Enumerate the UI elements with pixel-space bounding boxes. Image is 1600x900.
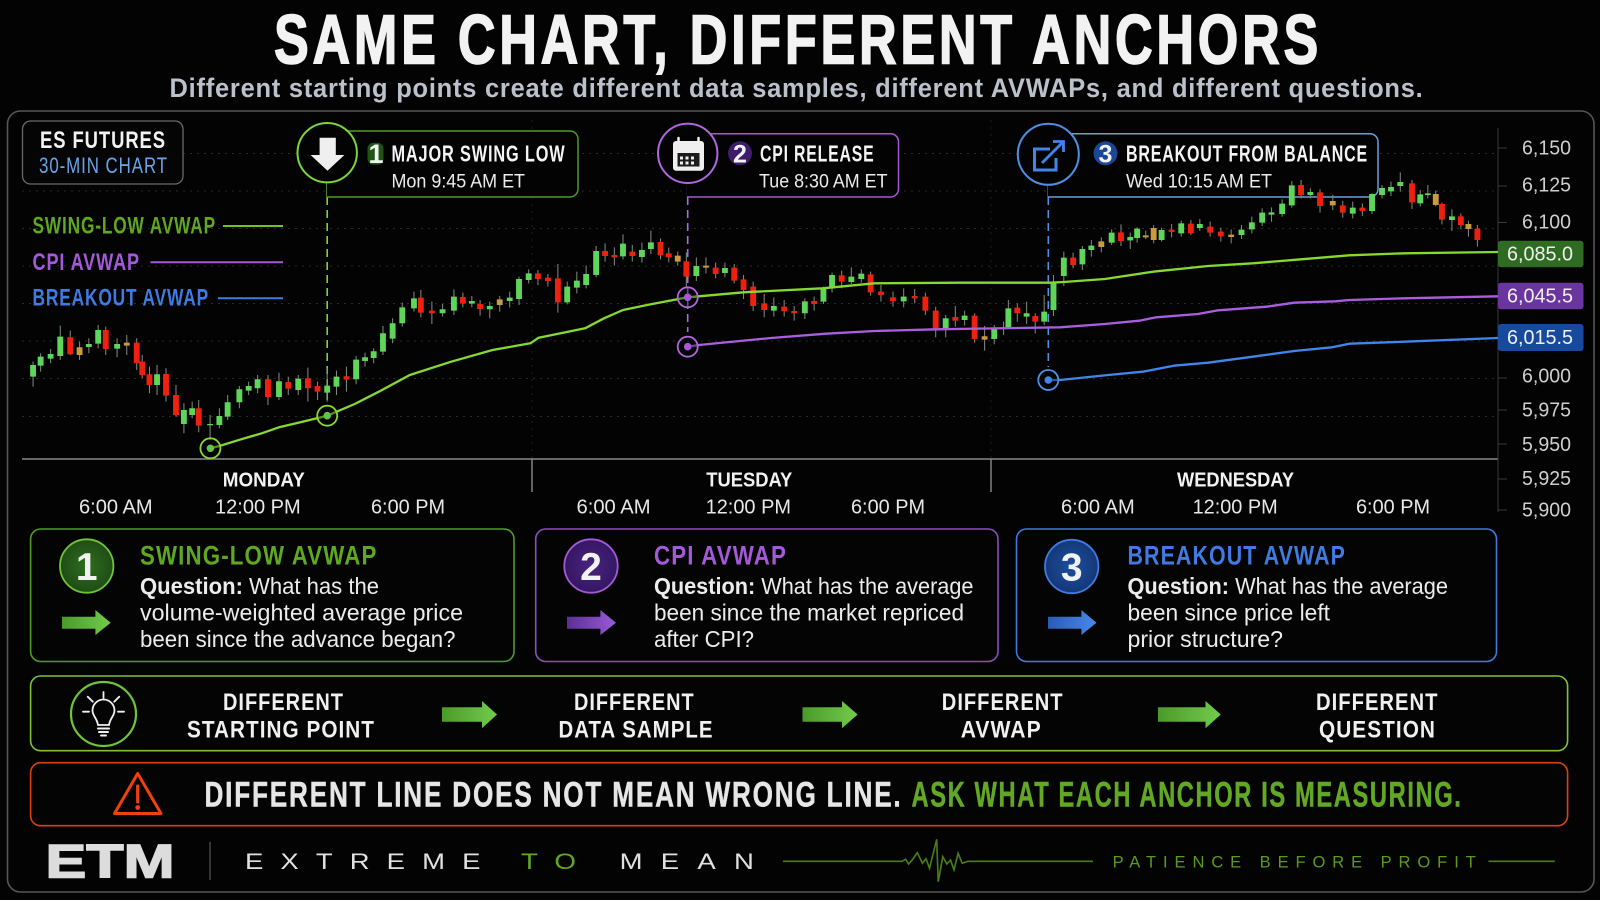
- icon: warning triangle: [114, 774, 161, 814]
- panel: breakout card: been since price left: [1128, 600, 1331, 626]
- arrow: [802, 701, 858, 728]
- panel: CPI card: after CPI?: [654, 626, 754, 652]
- panel: CPI card: CPI AVWAP: [654, 540, 787, 570]
- panel: breakout card: prior structure?: [1128, 626, 1283, 652]
- icon: calendar: [673, 138, 704, 171]
- icon: arrow: [1048, 610, 1096, 635]
- panel: logic chain band: AVWAP: [961, 716, 1042, 743]
- panel: CPI card: Question: What has the average: [654, 573, 974, 599]
- icon: light bulb: [71, 682, 136, 746]
- callout 3: breakout marker: [1018, 124, 1079, 185]
- time axis labels: 6:00 AM: [576, 496, 650, 518]
- panel: swing-low card: volume-weighted average price: [140, 600, 463, 626]
- callout 3 box (behind candles): BREAKOUT FROM BALANCE: [1126, 141, 1368, 167]
- price axis labels: 5,950: [1522, 434, 1571, 456]
- footer brand: TO: [521, 849, 593, 874]
- price axis labels: 6,125: [1522, 175, 1571, 197]
- time axis labels: [79, 469, 1430, 518]
- panel: logic chain band: DIFFERENT: [942, 689, 1064, 716]
- callout 1: major swing low: Mon 9:45 AM ET: [392, 171, 525, 193]
- candlesticks: tuesday: [548, 231, 1064, 351]
- tag: CPI: 6,045.5: [1507, 284, 1573, 307]
- price tags: [1498, 241, 1584, 351]
- callout 1: major swing low: MAJOR SWING LOW: [392, 141, 566, 167]
- panel: CPI card: 2: [580, 546, 602, 589]
- anchor guide lines: [327, 183, 1048, 405]
- price axis ticks: [1498, 128, 1507, 512]
- candlesticks: wednesday: [1073, 172, 1477, 270]
- time axis labels: 12:00 PM: [215, 496, 301, 518]
- panel: logic chain band: STARTING POINT: [187, 716, 375, 743]
- footer brand: MEAN: [620, 849, 772, 874]
- panel: swing-low card: Question: What has the: [140, 573, 379, 599]
- callout 2: CPI release: Tue 8:30 AM ET: [759, 171, 888, 193]
- tag: breakout: 6,015.5: [1507, 326, 1573, 349]
- callout 1: major swing low: [298, 123, 578, 197]
- panel: swing-low card: 1: [76, 546, 98, 589]
- panel: logic chain band: QUESTION: [1319, 716, 1436, 743]
- panel: CPI card: been since the market repriced: [654, 600, 964, 626]
- panel: warning band: [31, 763, 1568, 826]
- panel: swing-low card: [31, 529, 514, 662]
- number badge: 1: [368, 139, 384, 169]
- arrow: [442, 701, 497, 728]
- heartbeat line: [783, 839, 1093, 882]
- time axis labels: 6:00 AM: [1061, 496, 1135, 518]
- swing-low AVWAP line: [210, 252, 1498, 448]
- arrow: [1158, 701, 1221, 728]
- panel: warning band: DIFFERENT LINE DOES NOT MEAN WRONG LINE.: [204, 776, 902, 815]
- price chart: [22, 120, 1507, 512]
- price axis labels: 6,150: [1522, 137, 1571, 159]
- icon: breakout arrow: [1034, 142, 1064, 170]
- chart info box: [22, 121, 183, 184]
- candlesticks: monday: [33, 269, 538, 440]
- time axis labels: 6:00 PM: [851, 496, 925, 518]
- panel: swing-low card: SWING-LOW AVWAP: [140, 540, 378, 570]
- legend: [32, 212, 283, 312]
- time axis labels: 6:00 PM: [371, 496, 445, 518]
- tag: swing-low: 6,085.0: [1507, 243, 1573, 266]
- time axis labels: WEDNESDAY: [1177, 469, 1294, 492]
- legend: BREAKOUT AVWAP: [32, 285, 209, 312]
- anchor markers: [200, 287, 1058, 458]
- time axis baseline: [22, 459, 1498, 492]
- callout 2: CPI release: [658, 124, 898, 197]
- panel: breakout card: 3: [1061, 546, 1083, 590]
- footer brand: PATIENCE BEFORE PROFIT: [1113, 853, 1476, 871]
- price axis labels: 6,000: [1522, 366, 1571, 388]
- price axis labels: [1522, 137, 1571, 522]
- footer brand: [46, 834, 1555, 887]
- subtitle: Different starting points create different data samples, different AVWAPs, and different questions.: [170, 73, 1424, 103]
- chart info box: 30-MIN CHART: [39, 153, 168, 178]
- panel: logic chain band: DIFFERENT: [1316, 689, 1438, 716]
- panel: breakout card: [1016, 529, 1496, 662]
- footer brand: EXTREME: [245, 849, 498, 874]
- legend: SWING-LOW AVWAP: [32, 212, 216, 239]
- panel: logic chain band: [31, 676, 1568, 751]
- panel: CPI card: [536, 529, 998, 662]
- panel: swing-low card: been since the advance began?: [140, 626, 456, 652]
- time axis labels: MONDAY: [223, 469, 305, 492]
- chart info box: ES FUTURES: [40, 127, 166, 154]
- legend: CPI AVWAP: [32, 249, 140, 276]
- CPI AVWAP line: [688, 296, 1498, 347]
- panel: logic chain band: DATA SAMPLE: [558, 716, 714, 743]
- callout 2: CPI release: CPI RELEASE: [760, 141, 874, 167]
- panel: breakout card: Question: What has the average: [1128, 573, 1448, 599]
- callout 3 box (behind candles): Wed 10:15 AM ET: [1126, 171, 1272, 193]
- icon: arrow: [567, 610, 616, 635]
- callout 3 box (behind candles): 3: [1099, 140, 1112, 168]
- time axis labels: 12:00 PM: [1193, 496, 1278, 518]
- callout 2: CPI release: 2: [733, 140, 747, 168]
- callout 3 box (behind candles): [1048, 134, 1378, 197]
- price axis labels: 6,100: [1522, 211, 1571, 233]
- price axis labels: 5,900: [1522, 500, 1571, 522]
- time axis labels: TUESDAY: [706, 469, 793, 492]
- time axis labels: 12:00 PM: [706, 496, 791, 518]
- time axis labels: 6:00 AM: [79, 496, 153, 518]
- icon: down arrow: [311, 138, 344, 171]
- panel: logic chain band: DIFFERENT: [574, 689, 695, 716]
- icon: arrow: [62, 610, 111, 635]
- panel: breakout card: BREAKOUT AVWAP: [1128, 540, 1346, 570]
- time axis labels: 6:00 PM: [1356, 496, 1430, 518]
- price axis labels: 5,975: [1522, 400, 1571, 422]
- price axis labels: 5,925: [1522, 468, 1571, 490]
- panel: logic chain band: DIFFERENT: [223, 689, 344, 716]
- ETM logo: ETM: [46, 834, 174, 887]
- breakout AVWAP line: [1048, 338, 1498, 380]
